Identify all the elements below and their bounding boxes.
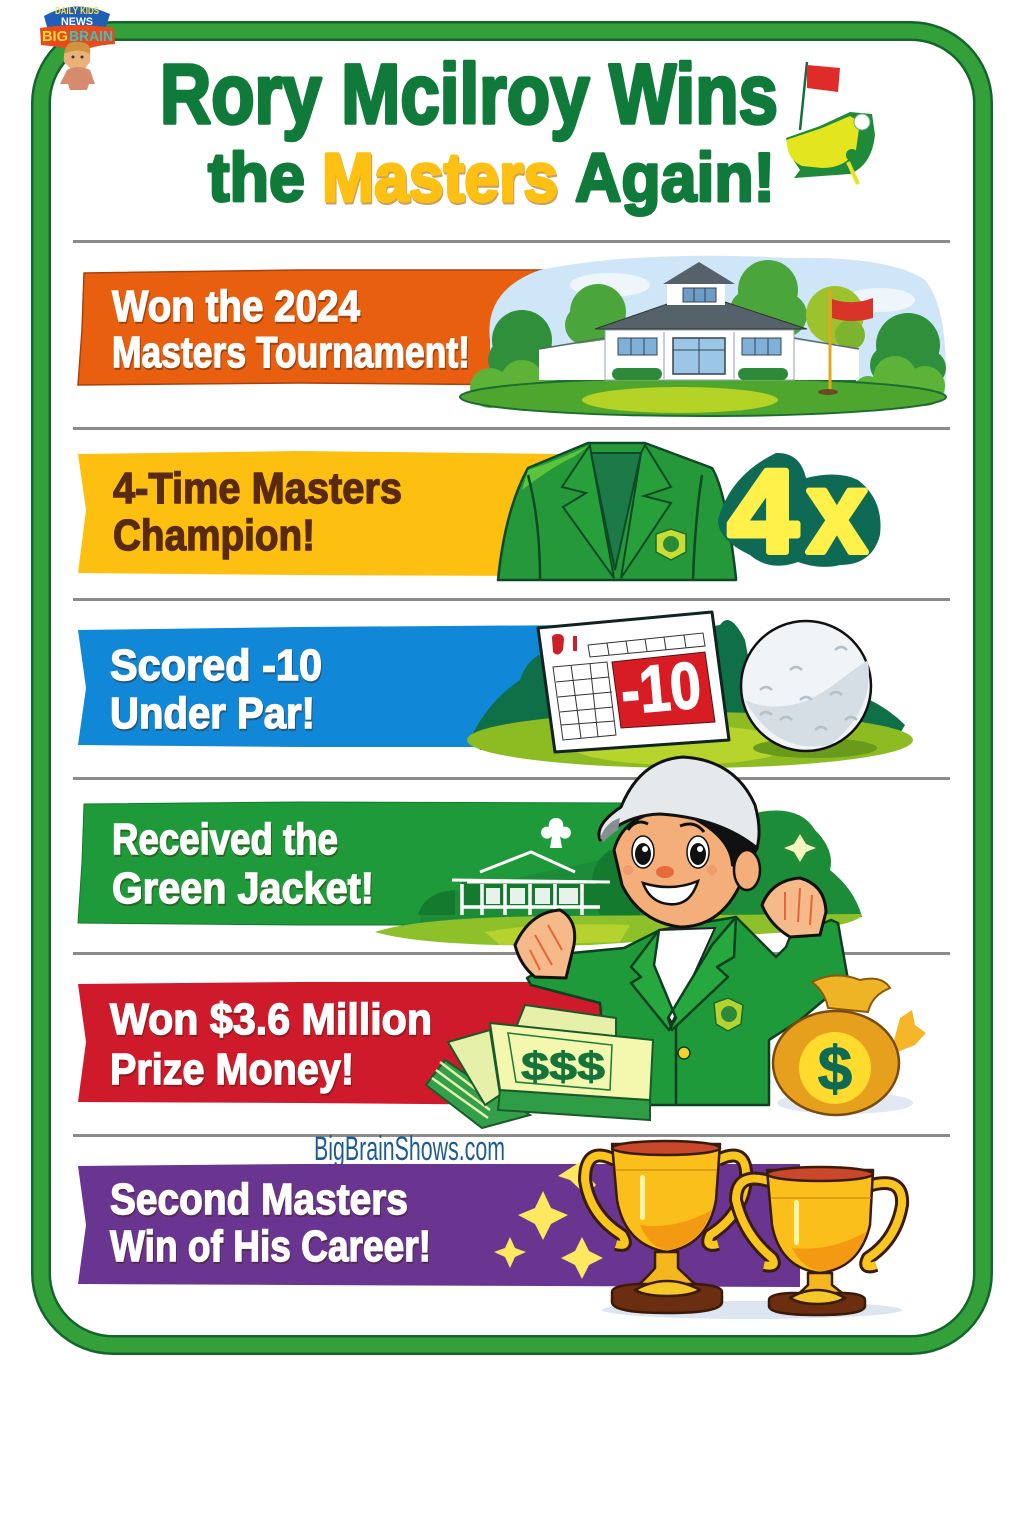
- yellow banner: [78, 451, 560, 576]
- panel: Second Masters Win: [78, 1141, 902, 1319]
- jacket body: [527, 917, 848, 1105]
- banner text: Received the: [112, 815, 338, 864]
- banner text: Win of His Career!: [110, 1222, 431, 1271]
- panel: 4-Time Masters Champion: [78, 443, 881, 580]
- banner text: Second Masters: [110, 1175, 408, 1224]
- banner text: [113, 464, 402, 560]
- title: Rory Mcilroy Wins: [160, 47, 778, 141]
- green banner: [78, 802, 640, 925]
- orange banner: [78, 270, 560, 385]
- clubhouse and hill scene: [375, 810, 862, 945]
- icon: flag and Georgia map: [786, 62, 875, 184]
- icon: green jacket: [498, 443, 736, 580]
- banner text: Under Par!: [110, 689, 315, 738]
- badge: 4x: 4: [728, 446, 798, 578]
- logo: Daily Kids News Big Brain: [40, 6, 115, 90]
- banner text: Won the 2024: [112, 282, 360, 331]
- banner text: Masters Tournament!: [112, 328, 470, 377]
- icons: gold trophies: [585, 1141, 902, 1319]
- logo: Daily Kids News Big Brain: BRAIN: [69, 28, 113, 45]
- icon: stack of dollar bills: $$$: [521, 1045, 605, 1089]
- panel: Won $3.6 Million Prize Money: [78, 982, 612, 1105]
- logo: Daily Kids News Big Brain: NEWS: [61, 16, 93, 28]
- banner text: Scored -10: [110, 641, 322, 690]
- banner text: 4-Time Masters: [113, 464, 402, 513]
- banner text: [112, 282, 470, 377]
- scorecard and golf ball scene: [467, 612, 913, 768]
- banner text: [110, 995, 432, 1094]
- panel: Scored -10 Under Par: [78, 612, 913, 768]
- green rounded frame: [41, 31, 983, 1345]
- banner text: Prize Money!: [110, 1045, 354, 1094]
- panel: Received the Green Jacket: [78, 802, 862, 945]
- badge: 4x: x: [807, 447, 867, 577]
- fists: [515, 878, 826, 978]
- banner text: Champion!: [113, 511, 315, 560]
- blue banner: [78, 625, 590, 747]
- head: [614, 810, 745, 927]
- icon: stack of dollar bills: [426, 1005, 653, 1128]
- icons: sparkles: [494, 1162, 603, 1279]
- logo: Daily Kids News Big Brain: BIG: [42, 28, 68, 45]
- red banner: [78, 982, 612, 1105]
- banner text: Won $3.6 Million: [110, 995, 432, 1044]
- illustration: golfer in green jacket: [515, 757, 848, 1105]
- icon: money bag: [773, 975, 926, 1115]
- title: Masters: [322, 139, 558, 216]
- logo: Daily Kids News Big Brain: DAILY KIDS: [55, 6, 99, 17]
- banner text: [110, 641, 322, 738]
- banner text: [110, 1175, 431, 1271]
- panel: Won the 2024: [78, 256, 946, 416]
- badge: 4x: [718, 446, 881, 578]
- title: [160, 47, 778, 216]
- title: Again!: [575, 139, 775, 216]
- icon: money bag: $: [818, 1035, 852, 1104]
- purple banner: [78, 1164, 800, 1287]
- clubhouse scene: [460, 256, 946, 416]
- banner text: Green Jacket!: [112, 864, 374, 913]
- banner text: [112, 815, 374, 913]
- scorecard and golf ball scene: -10: [618, 647, 704, 728]
- title: the: [208, 139, 305, 216]
- cap: [599, 757, 759, 848]
- watermark: BigBrainShows.com: BigBrainShows.com: [314, 1130, 505, 1168]
